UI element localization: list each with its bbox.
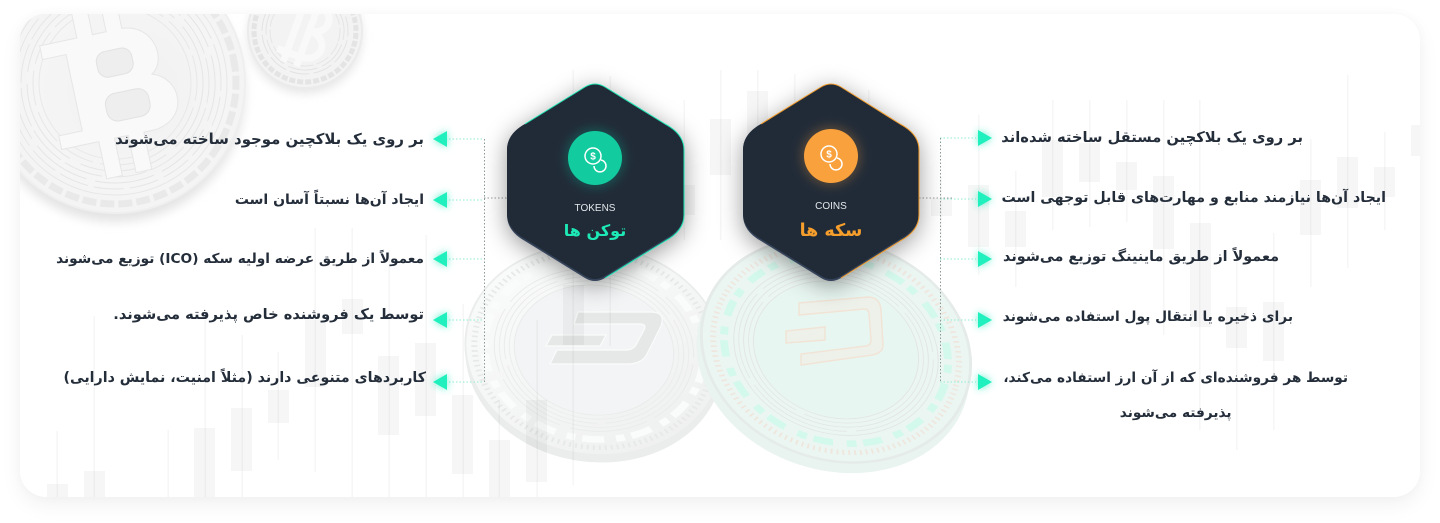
arrow: token 4 xyxy=(430,308,453,332)
text: coin 5: پذیرفته می‌شوند xyxy=(1120,405,1232,421)
hexagon: tokens xyxy=(491,76,700,300)
arrow: coin 4 xyxy=(972,308,995,332)
arrow: token 2 xyxy=(430,188,453,212)
green dash coin xyxy=(696,245,972,473)
hexagon: coins: $ xyxy=(826,150,832,160)
arrow: coin 5 xyxy=(972,370,995,394)
label: COINS: COINS xyxy=(815,201,847,212)
hexagon: tokens: $ xyxy=(590,152,596,162)
arrow: token 5 xyxy=(430,370,453,394)
candlestick chart xyxy=(47,70,1420,497)
text: token 4: توسط یک فروشنده خاص پذیرفته می‌شوند. xyxy=(113,306,424,323)
text: token 1: بر روی یک بلاکچین موجود ساخته می‌شوند xyxy=(115,130,424,148)
text: token 5: کاربردهای متنوعی دارند (مثلاً امنیت، نمایش دارایی) xyxy=(64,370,426,386)
arrow: token 1 xyxy=(430,128,453,150)
arrow: coin 2 xyxy=(972,188,995,210)
arrow: coin 3 xyxy=(972,248,995,270)
title: tokens: توکن ها xyxy=(564,221,626,240)
text: token 2: ایجاد آن‌ها نسبتاً آسان است xyxy=(235,192,424,208)
text: coin 1: بر روی یک بلاکچین مستقل ساخته شده‌اند xyxy=(1001,129,1303,146)
arrow: token 3 xyxy=(430,248,453,270)
text: coin 3: معمولاً از طریق ماینینگ توزیع می‌شوند xyxy=(1003,249,1279,265)
connector lines right xyxy=(919,138,976,382)
hexagon: coins xyxy=(727,76,935,300)
grey dash coin xyxy=(464,251,714,462)
text: coin 2: ایجاد آن‌ها نیازمند منابع و مهارت‌های قابل توجهی است xyxy=(1002,190,1386,206)
label: TOKENS: TOKENS xyxy=(575,203,615,214)
text: token 3: معمولاً از طریق عرضه اولیه سکه (ICO) توزیع می‌شوند xyxy=(56,251,424,267)
text: coin 5: توسط هر فروشنده‌ای که از آن ارز استفاده می‌کند، xyxy=(1003,370,1348,386)
big bitcoin xyxy=(20,14,248,224)
title: coins: سکه ها xyxy=(800,221,862,241)
arrow: coin 1 xyxy=(972,126,995,150)
small bitcoin xyxy=(246,14,364,96)
connector lines left xyxy=(449,139,507,382)
text: coin 5 xyxy=(1003,369,1348,421)
text: coin 4: برای ذخیره یا انتقال پول استفاده می‌شوند xyxy=(1003,309,1293,325)
